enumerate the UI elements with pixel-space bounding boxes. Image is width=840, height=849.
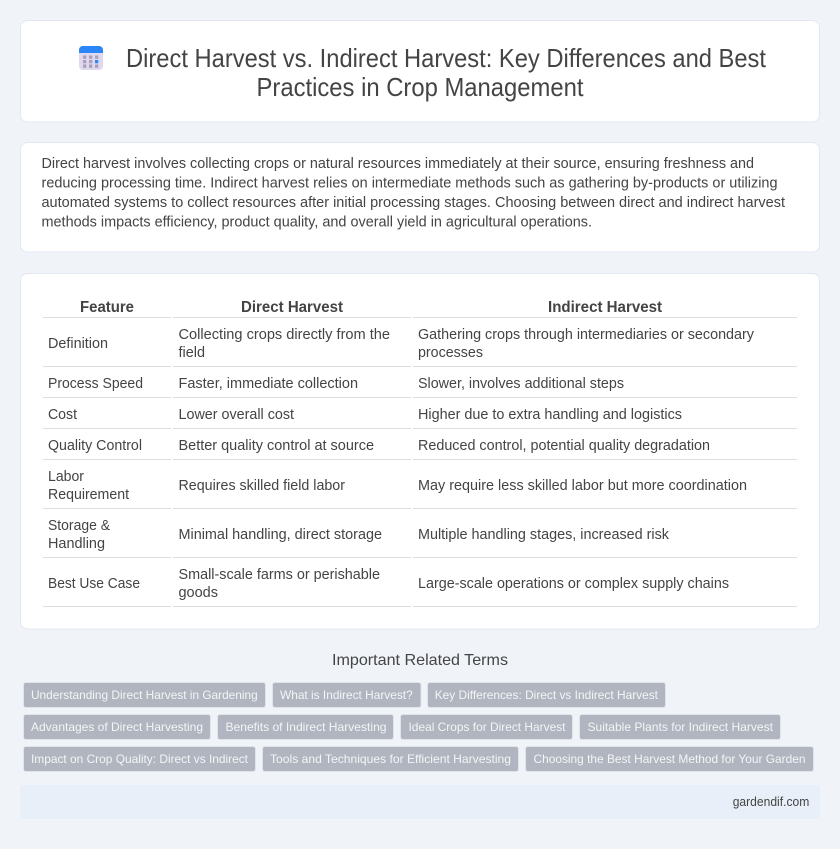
row: Cost: Higher due to extra handling and logistics <box>418 407 682 423</box>
row: Best Use Case: Small-scale farms or perishable <box>178 567 380 583</box>
chip <box>24 746 256 772</box>
chip: Choosing the Best Harvest Method for Your Garden <box>534 752 806 766</box>
chip: What is Indirect Harvest? <box>280 688 413 702</box>
row: Labor Requirement: Requires skilled field labor <box>178 478 345 494</box>
chip <box>428 682 666 708</box>
row: Cost: Lower overall cost <box>178 407 294 423</box>
related terms chips <box>24 682 814 772</box>
row: Quality Control: Quality Control <box>48 438 142 454</box>
chip: Tools and Techniques for Efficient Harvesting <box>270 752 511 766</box>
intro panel <box>20 142 820 252</box>
intro paragraph: reducing processing time. Indirect harvest relies on intermediate methods such as gathering by-products or utilizing <box>42 176 777 192</box>
chip <box>24 682 266 708</box>
title: Direct Harvest vs. Indirect Harvest: Key Differences and Best <box>126 45 766 73</box>
icon: calendar <box>79 46 103 70</box>
chip: Key Differences: Direct vs Indirect Harvest <box>435 688 659 702</box>
intro paragraph <box>42 156 785 230</box>
chip: Understanding Direct Harvest in Gardening <box>31 688 258 702</box>
row: Definition <box>43 327 797 367</box>
chip: Advantages of Direct Harvesting <box>31 720 203 734</box>
row: Quality Control: Reduced control, potential quality degradation <box>418 438 710 454</box>
table header row: Direct Harvest <box>241 299 344 316</box>
row: Process Speed: Faster, immediate collection <box>178 376 358 392</box>
row: Best Use Case <box>43 567 797 607</box>
chip: Impact on Crop Quality: Direct vs Indirect <box>31 752 249 766</box>
row: Definition: Definition <box>48 336 108 352</box>
chip <box>24 714 210 740</box>
row: Storage & Handling <box>43 518 797 558</box>
chip <box>218 714 394 740</box>
chip <box>262 746 518 772</box>
chip: Suitable Plants for Indirect Harvest <box>588 720 774 734</box>
table header row: Feature <box>80 299 134 316</box>
row: Definition: Collecting crops directly from the <box>178 327 390 343</box>
row: Quality Control: Better quality control at source <box>178 438 374 454</box>
row: Labor Requirement: Labor <box>48 469 84 485</box>
row: Process Speed: Slower, involves additional steps <box>418 376 624 392</box>
row: Best Use Case: Large-scale operations or complex supply chains <box>418 576 729 592</box>
row: Cost: Cost <box>48 407 77 423</box>
chip <box>526 746 814 772</box>
row: Storage & Handling: Handling <box>48 536 105 552</box>
chip <box>400 714 572 740</box>
row: Definition: processes <box>418 345 483 361</box>
comparison table panel <box>20 274 820 629</box>
footer: gardendif.com <box>733 794 809 809</box>
chip: Ideal Crops for Direct Harvest <box>408 720 566 734</box>
row: Process Speed <box>43 376 797 398</box>
intro paragraph: automated systems to collect resources after initial processing stages. Choosing between direct and indirect harvest <box>42 195 785 211</box>
row: Storage & Handling: Storage & <box>48 518 110 534</box>
row: Best Use Case: goods <box>178 585 218 601</box>
chip: Benefits of Indirect Harvesting <box>226 720 386 734</box>
title: Practices in Crop Management <box>256 74 584 102</box>
footer <box>20 785 820 819</box>
row: Labor Requirement: May require less skilled labor but more coordination <box>418 478 747 494</box>
chip <box>272 682 421 708</box>
row: Quality Control <box>43 438 797 460</box>
row: Best Use Case: Best Use Case <box>48 576 140 592</box>
chip <box>580 714 780 740</box>
row: Storage & Handling: Minimal handling, direct storage <box>178 527 382 543</box>
row: Labor Requirement <box>43 469 797 509</box>
intro paragraph: Direct harvest involves collecting crops or natural resources immediately at their source, ensuring freshness and <box>42 156 754 172</box>
row: Process Speed: Process Speed <box>48 376 143 392</box>
header panel <box>20 20 820 122</box>
row: Labor Requirement: Requirement <box>48 487 129 503</box>
title <box>126 45 766 102</box>
related terms heading: Important Related Terms <box>332 652 508 669</box>
table header row: Indirect Harvest <box>548 299 663 316</box>
row: Definition: field <box>178 345 205 361</box>
intro paragraph: methods impacts efficiency, product quality, and overall yield in agricultural operations. <box>42 214 592 230</box>
row: Definition: Gathering crops through intermediaries or secondary <box>418 327 755 343</box>
row: Storage & Handling: Multiple handling stages, increased risk <box>418 527 670 543</box>
row: Cost <box>43 407 797 429</box>
table header row <box>43 299 797 318</box>
